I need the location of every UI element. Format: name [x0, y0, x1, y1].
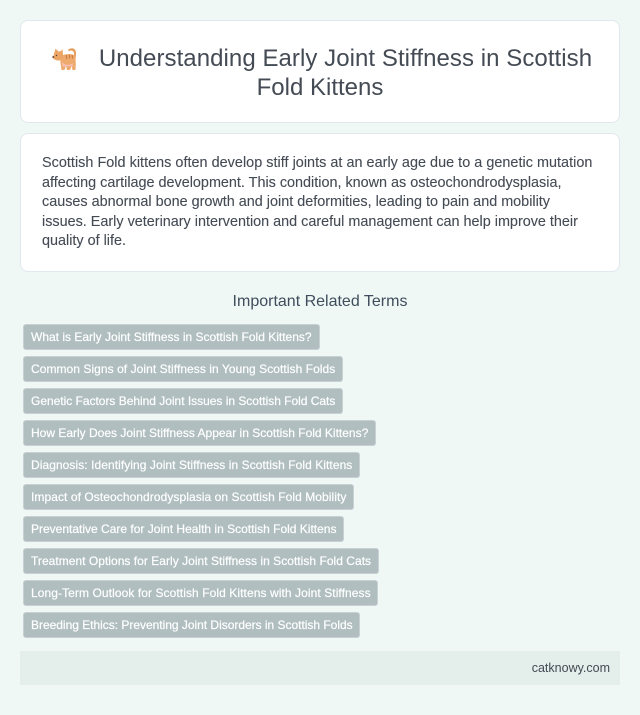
tag	[23, 548, 379, 574]
panel: description card	[20, 133, 620, 272]
description text: issues. Early veterinary intervention and careful management can help improve their	[42, 214, 578, 230]
description text: affecting cartilage development. This condition, known as osteochondrodysplasia,	[42, 174, 561, 190]
tag: Impact of Osteochondrodysplasia on Scottish Fold Mobility	[31, 490, 346, 504]
description text: causes abnormal bone growth and joint deformities, leading to pain and mobility	[42, 194, 550, 210]
description text	[42, 155, 592, 249]
tag	[23, 516, 344, 542]
description text: Scottish Fold kittens often develop stiff joints at an early age due to a genetic mutation	[42, 155, 592, 171]
tag: Common Signs of Joint Stiffness in Young Scottish Folds	[31, 362, 335, 376]
tag	[23, 580, 378, 606]
tag: Diagnosis: Identifying Joint Stiffness in Scottish Fold Kittens	[31, 458, 352, 472]
tag: Long-Term Outlook for Scottish Fold Kittens with Joint Stiffness	[31, 586, 371, 600]
tag	[23, 324, 320, 350]
tag	[23, 356, 343, 382]
tag	[23, 612, 360, 638]
tag: Genetic Factors Behind Joint Issues in Scottish Fold Cats	[31, 394, 335, 408]
title	[99, 45, 592, 101]
tag	[23, 388, 343, 414]
footer bar	[20, 651, 620, 685]
icon: cat	[52, 48, 76, 70]
heading: important related terms: Important Related Terms	[233, 293, 407, 310]
tag	[23, 420, 376, 446]
footer source text: catknowy.com	[532, 661, 610, 675]
tag: Treatment Options for Early Joint Stiffness in Scottish Fold Cats	[31, 554, 371, 568]
tag: What is Early Joint Stiffness in Scottish Fold Kittens?	[31, 330, 312, 344]
tag	[23, 484, 354, 510]
tag: How Early Does Joint Stiffness Appear in Scottish Fold Kittens?	[31, 426, 368, 440]
description text: quality of life.	[42, 233, 126, 249]
tag: Preventative Care for Joint Health in Scottish Fold Kittens	[31, 522, 336, 536]
tag	[23, 452, 360, 478]
panel: title card	[20, 20, 620, 123]
tag list	[23, 324, 379, 638]
title: Fold Kittens	[257, 74, 383, 101]
tag: Breeding Ethics: Preventing Joint Disorders in Scottish Folds	[31, 618, 353, 632]
title: Understanding Early Joint Stiffness in Scottish	[99, 45, 592, 72]
